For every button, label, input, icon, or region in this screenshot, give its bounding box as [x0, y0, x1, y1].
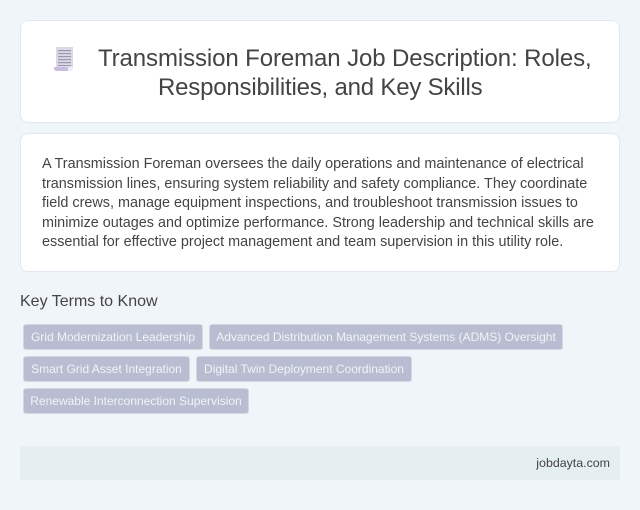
- description text: minimize outages and optimize performance. Strong leadership and technical skills are: [42, 215, 594, 231]
- footer source text: jobdayta.com: [536, 456, 610, 470]
- tag: Advanced Distribution Management Systems (ADMS) Oversight: [216, 330, 556, 344]
- tag: [23, 324, 203, 350]
- tag: [209, 324, 563, 350]
- heading: key terms: Key Terms to Know: [20, 293, 158, 310]
- panel: title card: [20, 20, 620, 123]
- icon: document receipt: [54, 47, 73, 71]
- description text: field crews, manage equipment inspections, and troubleshoot transmission issues to: [42, 195, 578, 211]
- description text: essential for effective project management and team supervision in this utility role.: [42, 234, 563, 250]
- panel: description card: [20, 133, 620, 272]
- title: Responsibilities, and Key Skills: [158, 74, 482, 101]
- tag: Renewable Interconnection Supervision: [30, 394, 242, 408]
- title: Transmission Foreman Job Description: Roles,: [98, 45, 592, 72]
- description text: transmission lines, ensuring system reliability and safety compliance. They coordinate: [42, 176, 587, 192]
- tag: [23, 356, 190, 382]
- tag: Digital Twin Deployment Coordination: [204, 362, 404, 376]
- tag list: [23, 324, 563, 414]
- tag: [23, 388, 249, 414]
- footer bar: [20, 446, 620, 480]
- description text: [42, 156, 594, 250]
- tag: [196, 356, 412, 382]
- title: [98, 45, 592, 101]
- tag: Grid Modernization Leadership: [31, 330, 195, 344]
- tag: Smart Grid Asset Integration: [31, 362, 182, 376]
- description text: A Transmission Foreman oversees the daily operations and maintenance of electrical: [42, 156, 584, 172]
